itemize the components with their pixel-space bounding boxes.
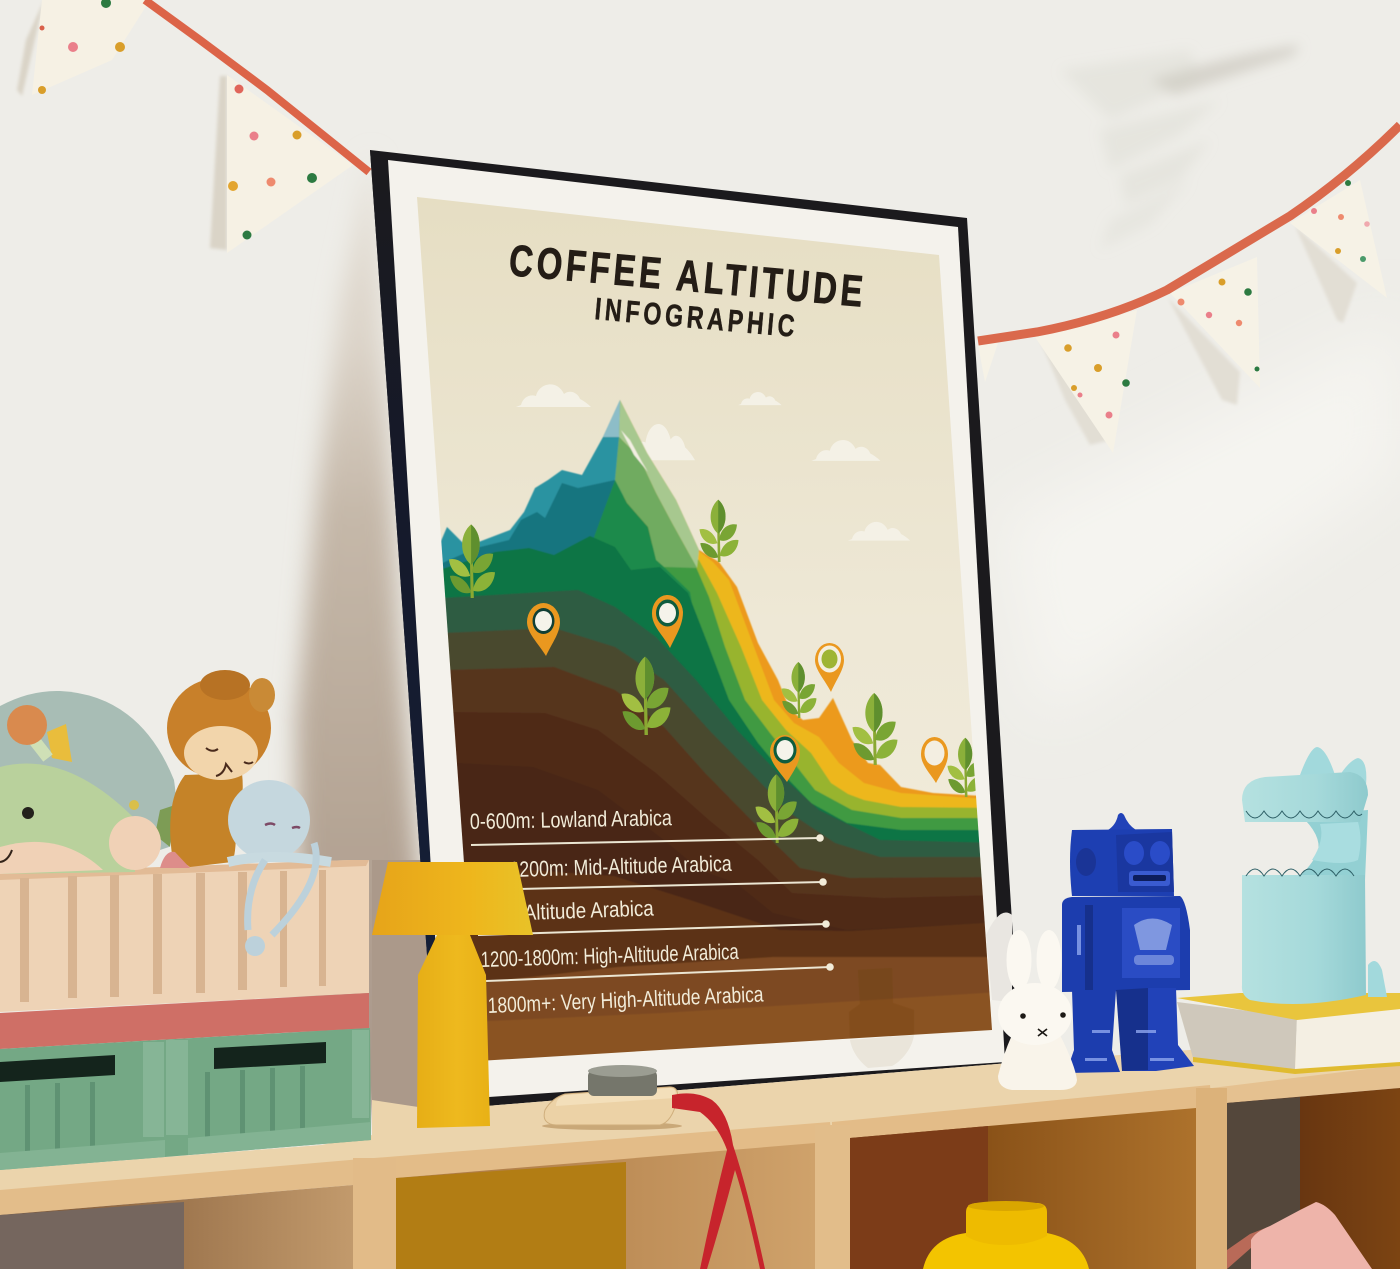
dino jaw [1242, 772, 1368, 822]
earth ball [0, 691, 176, 870]
yellow lego storage head [923, 1201, 1089, 1269]
right post [1196, 1088, 1227, 1269]
flag shadows [1040, 226, 1357, 445]
leader line 3 [478, 920, 830, 935]
robot head [1070, 829, 1174, 896]
pin 2 [652, 595, 683, 648]
plant 3 [622, 657, 670, 735]
pale snow ridge [619, 400, 699, 568]
bunny head [998, 983, 1072, 1045]
pin 5 [921, 737, 948, 783]
upper teeth [1246, 811, 1362, 818]
far right rail [1212, 1065, 1400, 1108]
centre cubby [396, 1143, 815, 1269]
white mat [388, 160, 1005, 1100]
brown layer 4 [470, 870, 987, 980]
teal mountain body [430, 400, 625, 610]
robot arm shading [1085, 905, 1093, 990]
sub-heading: infographic: INFOGRAPHIC [593, 291, 796, 344]
plant 2 [700, 500, 738, 562]
flag 1 [1035, 310, 1137, 453]
leader line 1 [471, 834, 824, 845]
dark green hillside [443, 536, 980, 843]
brown layer 2 [454, 712, 984, 929]
centre rail [374, 1122, 832, 1180]
bear plush [167, 670, 275, 867]
pink lid band [0, 993, 369, 1049]
dino spikes [1300, 747, 1387, 997]
pin 4 [770, 735, 800, 782]
robot mouth [1129, 871, 1170, 886]
brown layer 3 [425, 763, 1000, 1080]
green crate [0, 1028, 371, 1170]
small flag at frame [978, 343, 998, 382]
olive layer [448, 629, 982, 878]
leader line 2 [474, 878, 827, 890]
mountain layers [425, 400, 1000, 1080]
plant 7 [948, 738, 976, 797]
brown layer 5 [486, 956, 990, 1022]
plant 6 [756, 774, 798, 843]
plush toys [0, 670, 331, 956]
dark teal shade [443, 480, 615, 569]
storage crates [0, 860, 371, 1170]
dinosaur money box [1242, 747, 1387, 1004]
mountain illustration [425, 384, 1000, 1080]
robot legs [1066, 990, 1120, 1073]
poster frame [370, 150, 1021, 1110]
right rail [832, 1085, 1212, 1150]
brown layer 6 [488, 993, 992, 1060]
robot eyes [1124, 841, 1170, 865]
bunny reflection [849, 968, 914, 1040]
bunny ears [1006, 930, 1062, 990]
red strap [672, 1093, 765, 1269]
lower teeth [1246, 869, 1354, 876]
clouds [516, 384, 910, 541]
light green face [615, 437, 697, 568]
white bunny lamp [986, 912, 1077, 1090]
label: very high altitude: 1800m+: Very High-Altitude Arabica [487, 981, 765, 1018]
art paper [417, 197, 992, 1061]
label: altitude: Altitude Arabica [523, 895, 655, 925]
centre post [815, 1125, 850, 1269]
right cubby [850, 1108, 1196, 1269]
blue robot money box [1062, 813, 1194, 1073]
wooden shelf [0, 1035, 1400, 1269]
right bunting [978, 125, 1400, 453]
string [978, 125, 1400, 341]
yellow mushroom lamp [372, 862, 533, 1128]
left rail [0, 1158, 373, 1215]
lime band [696, 559, 978, 819]
leader line 4 [486, 963, 834, 981]
bunny body [998, 1035, 1077, 1090]
robot antenna [1108, 813, 1136, 830]
flag: polka-dot pennant [227, 75, 353, 253]
string [145, 0, 369, 172]
octopus plush [228, 780, 331, 956]
location pins [527, 595, 948, 783]
robot highlights [1077, 925, 1174, 1061]
green face [594, 480, 692, 602]
plant 5 [852, 693, 898, 765]
far right cubby [1227, 1088, 1400, 1269]
bunting flag shadows [17, 0, 227, 250]
slate green layer [445, 590, 980, 858]
pin 1 [527, 603, 560, 656]
yellow band [698, 552, 977, 808]
ghost reflection [986, 912, 1012, 1002]
pink toy [1227, 1202, 1372, 1269]
bunny face [1020, 1012, 1066, 1036]
plant 4 [782, 662, 816, 718]
left cubby [0, 1185, 353, 1269]
left post [353, 1158, 396, 1269]
robot torso [1062, 896, 1190, 992]
plant 1 [449, 524, 495, 598]
left bunting [17, 0, 369, 253]
plants [449, 500, 984, 843]
snow notch [621, 430, 648, 472]
label: lowland: 0-600m: Lowland Arabica [470, 805, 673, 834]
pink crate [0, 860, 369, 1012]
dino neck [1296, 810, 1368, 880]
light peak [603, 400, 620, 437]
whale plush [0, 705, 190, 874]
flag: top-left [32, 0, 150, 95]
label: high altitude: 1200-1800m: High-Altitude Arabica [480, 939, 740, 972]
wooden toy camera [542, 1065, 682, 1130]
mid green band [664, 566, 978, 831]
robot gauge [1134, 918, 1172, 950]
flag 3 [1290, 180, 1387, 298]
bunny reflection on mat [850, 1035, 914, 1068]
orange slope [620, 402, 976, 800]
dino mouth cavity [1312, 822, 1360, 863]
poster title [507, 237, 865, 344]
book stack [1177, 993, 1400, 1074]
pin 3 [815, 643, 844, 692]
flag 2 [1170, 257, 1260, 388]
shelf top surface [0, 1035, 1400, 1215]
altitude legend [470, 805, 834, 1018]
leaf shadows on wall [1060, 45, 1298, 250]
dino body [1242, 875, 1366, 1004]
heading: coffee altitude: COFFEE ALTITUDE [507, 237, 865, 317]
brown layer 1 [450, 667, 983, 898]
label: mid altitude: 600-1200m: Mid-Altitude Arabica [473, 851, 733, 883]
